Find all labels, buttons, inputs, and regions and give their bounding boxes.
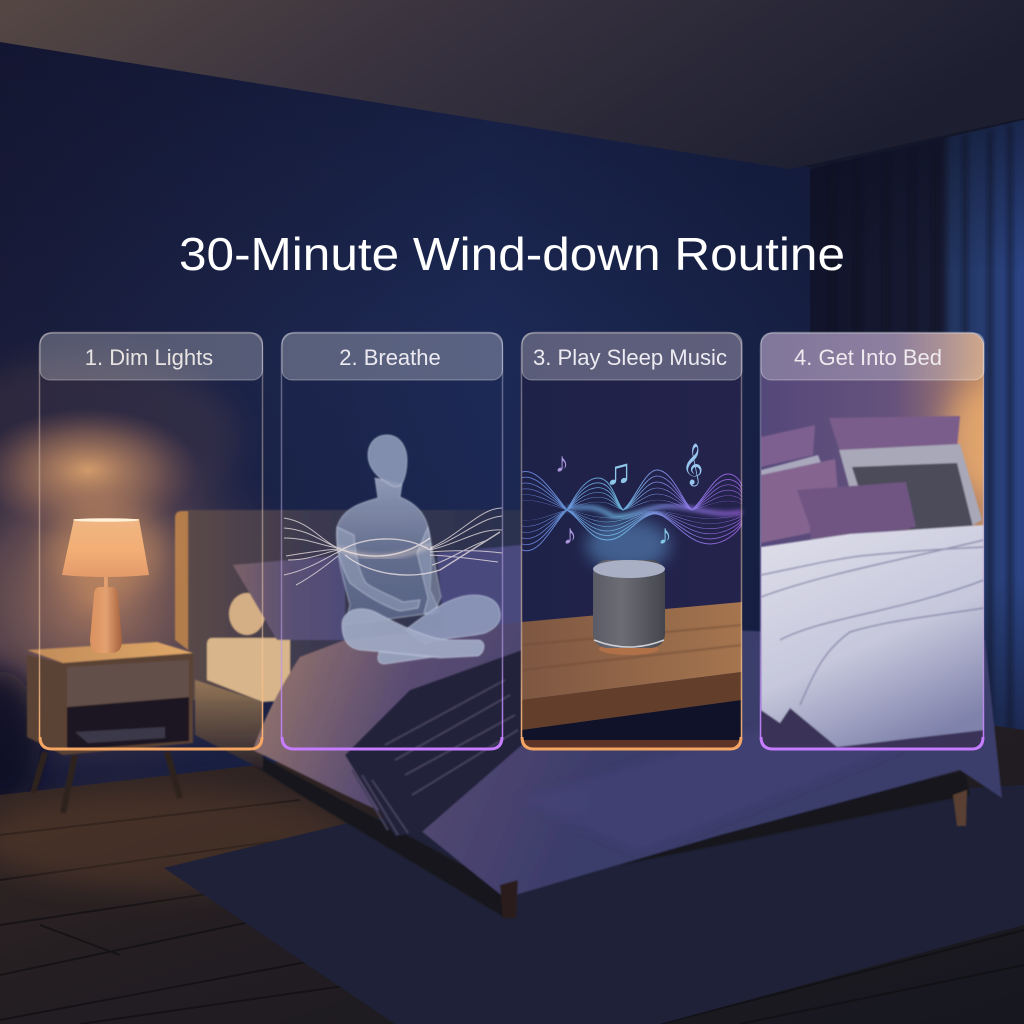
header: step 1: 1. Dim Lights (85, 345, 213, 370)
books (75, 727, 165, 743)
nightstand (27, 642, 193, 813)
shelf opening (67, 697, 189, 750)
left foot (378, 650, 440, 664)
dark wall corner (0, 670, 40, 810)
right arm (417, 527, 441, 615)
panel 4 scene (761, 333, 984, 748)
drawer (67, 660, 189, 707)
curtains (810, 120, 1024, 730)
header: step 4 (761, 333, 984, 380)
throw blanket (345, 650, 522, 836)
lamp base (90, 577, 122, 653)
header: step 3: 3. Play Sleep Music (533, 345, 727, 370)
header: step 4: 4. Get Into Bed (794, 345, 942, 370)
panel 2: breathe (282, 332, 502, 750)
left arm (337, 527, 420, 611)
meditating figure (337, 435, 500, 664)
lamp wall wash (0, 410, 310, 790)
panel 4 frame (760, 332, 984, 750)
lamp glow (46, 505, 166, 595)
left leg (342, 609, 484, 658)
header: step 2: 2. Breathe (339, 345, 441, 370)
panel 3: play sleep music (522, 332, 742, 750)
panel 1: dim lights (40, 332, 262, 750)
floor (0, 700, 1024, 1024)
sound wave (522, 470, 742, 551)
lamp (46, 505, 166, 653)
title: 30-Minute Wind-down Routine (179, 228, 845, 280)
lamp hot spot above shade (0, 408, 198, 532)
panel 3 scene (522, 333, 742, 749)
header: step 2 (282, 333, 502, 380)
headboard (188, 510, 525, 700)
header: step 3 (522, 333, 742, 380)
music notes (555, 443, 703, 550)
pillows (233, 555, 345, 640)
head (368, 435, 407, 487)
smart speaker (593, 560, 665, 655)
music notes: ♪ (555, 447, 569, 478)
nightstand legs (33, 752, 180, 813)
header: step 1 (40, 333, 262, 380)
bolster cushion (229, 593, 265, 635)
panel 4: get into bed (760, 332, 984, 750)
music notes: ♪ (658, 519, 672, 550)
right leg (405, 595, 500, 644)
nightstand body (27, 653, 193, 755)
duvet highlight (520, 720, 900, 850)
music notes: ♫ (605, 451, 632, 492)
back wall (0, 42, 815, 800)
music notes: ♪ (563, 519, 577, 550)
bed (175, 510, 1002, 918)
lamp shade (62, 519, 149, 577)
breath glow (338, 545, 430, 557)
duvet (253, 622, 1002, 898)
bed frame (253, 752, 970, 918)
breath lines (284, 508, 502, 585)
torso and neck (337, 478, 440, 625)
music notes: 𝄞 (682, 443, 703, 486)
mattress (207, 638, 290, 702)
panel 3 frame (522, 332, 742, 750)
bed legs (953, 790, 967, 826)
nightstand top (27, 642, 193, 663)
wave glow (567, 506, 742, 517)
broad upper glow (0, 355, 240, 525)
ceiling (0, 0, 1024, 169)
rug (164, 785, 1024, 1024)
